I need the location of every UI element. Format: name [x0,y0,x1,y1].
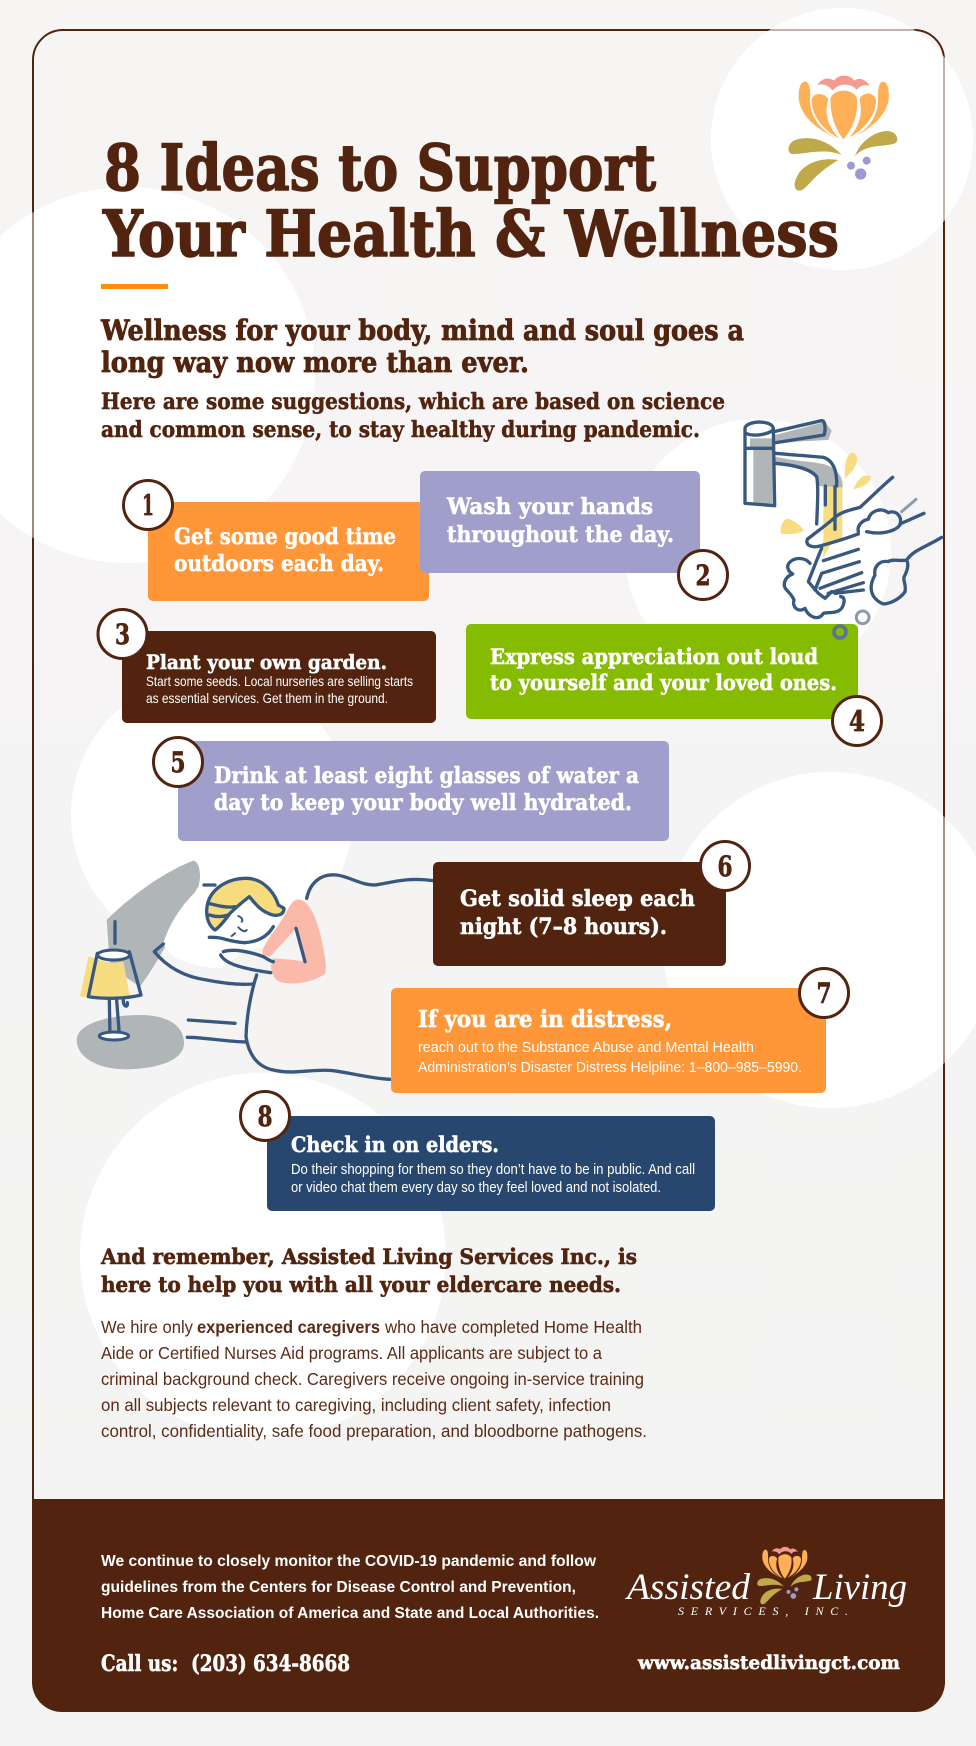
icon: flower [788,76,897,191]
footer statement [101,1553,599,1622]
closing paragraph: We hire only [101,1317,193,1337]
footer statement: We continue to closely monitor the COVID-19 pandemic and follow [101,1553,597,1570]
closing paragraph: on all subjects relevant to caregiving, including client safety, infection [101,1395,611,1415]
closing paragraph [101,1317,647,1441]
step 4: appreciation: 4 [849,705,865,738]
step 3: garden: Start some seeds. Local nurseries are selling starts [146,673,413,689]
step 1: outdoors: 1 [142,489,154,522]
footer panel [32,1499,945,1712]
footer statement: guidelines from the Centers for Disease Control and Prevention, [101,1579,576,1596]
intro heading: Wellness for your body, mind and soul goes a [100,314,744,347]
closing paragraph: Aide or Certified Nurses Aid programs. All applicants are subject to a [101,1343,602,1363]
step 8: elders: Do their shopping for them so they don’t have to be in public. And call [291,1161,695,1178]
intro text [101,389,725,443]
step 4: appreciation: Express appreciation out loud [490,644,818,669]
step 4: appreciation: to yourself and your loved ones. [490,670,837,695]
logo: SERVICES, INC. [678,1604,848,1618]
step 2: wash hands [420,471,728,600]
step 8: elders: Check in on elders. [291,1132,499,1157]
title: 8 Ideas to Support [104,131,656,206]
step 5: water: Drink at least eight glasses of water a [214,763,639,789]
title: Your Health & Wellness [102,197,839,272]
step 4: appreciation [466,624,882,746]
step 6: sleep: night (7–8 hours). [460,914,667,940]
step 6: sleep: 6 [718,850,732,883]
logo [624,1547,907,1618]
step 7: distress: Administration’s Disaster Distress Helpline: 1–800–985–5990. [418,1059,802,1076]
closing heading [100,1244,637,1297]
step 8: elders [240,1092,715,1211]
step 7: distress: 7 [816,977,832,1010]
phone number: Call us: (203) 634-8668 [101,1651,350,1677]
step 5: water [154,738,669,841]
step 3: garden: Plant your own garden. [146,650,387,674]
step 2: wash hands: 2 [696,559,710,592]
closing paragraph: criminal background check. Caregivers receive ongoing in-service training [101,1369,644,1389]
logo: Assisted [624,1567,751,1608]
closing paragraph: experienced caregivers [197,1317,380,1337]
step 1: outdoors [124,480,429,601]
step 5: water: day to keep your body well hydrated. [214,790,632,816]
step 7: distress [391,968,848,1093]
footer statement: Home Care Association of America and State and Local Authorities. [101,1605,599,1622]
step 6: sleep: Get solid sleep each [460,886,695,912]
closing paragraph: control, confidentiality, safe food preparation, and bloodborne pathogens. [101,1421,647,1441]
intro heading: long way now more than ever. [101,346,529,379]
step 8: elders: 8 [258,1100,272,1133]
intro text: Here are some suggestions, which are based on science [101,389,725,415]
step 1: outdoors: outdoors each day. [174,551,384,577]
illustration: person sleeping [77,861,437,1093]
illustration: washing hands [745,421,942,624]
step 1: outdoors: Get some good time [174,524,396,550]
step 7: distress: reach out to the Substance Abuse and Mental Health [418,1039,754,1056]
step 3: garden: 3 [115,618,130,651]
title [102,131,839,272]
step 2: wash hands: throughout the day. [447,522,674,548]
step 6: sleep [433,842,750,966]
step 3: garden: as essential services. Get them in the ground. [146,690,388,706]
intro heading [100,314,744,379]
intro text: and common sense, to stay healthy during pandemic. [101,417,700,443]
step 7: distress: If you are in distress, [418,1006,672,1033]
closing paragraph: who have completed Home Health [384,1317,642,1337]
website: www.assistedlivingct.com [637,1652,900,1674]
logo: Living [812,1567,907,1608]
closing heading: here to help you with all your eldercare needs. [101,1272,621,1297]
step 2: wash hands: Wash your hands [446,494,653,520]
closing heading: And remember, Assisted Living Services Inc., is [100,1244,637,1269]
step 5: water: 5 [170,746,186,779]
orange rule [101,284,168,289]
step 8: elders: or video chat them every day so they feel loved and not isolated. [291,1179,661,1196]
step 3: garden [98,610,436,723]
